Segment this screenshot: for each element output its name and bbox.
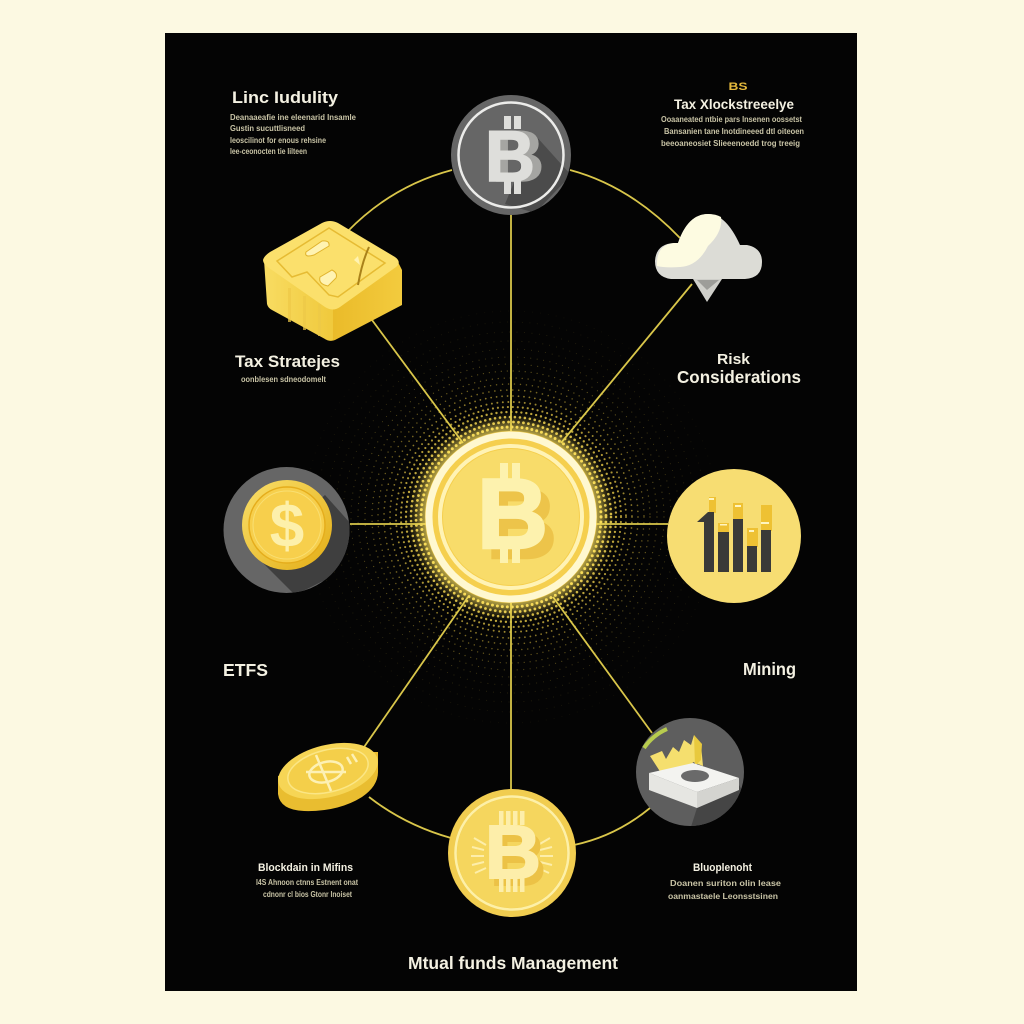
text block: tax top right: [661, 81, 804, 148]
bitcoin symbol shadow: B: [486, 468, 557, 579]
text block: tax top right: beeoaneosiet Slieeenoedd trog treeig: [661, 139, 800, 148]
bitcoin symbol: B: [477, 458, 548, 569]
text block: liquidity: Deanaaeafie ine eleenarid Insamle: [230, 113, 357, 122]
icon: dollar coin: $: [270, 492, 304, 561]
dark poster panel: [165, 33, 857, 991]
text block: risk considerations: Risk: [717, 351, 751, 368]
text block: risk considerations: [677, 351, 801, 387]
text block: liquidity: Iee-ceonocten tie Iilteen: [230, 147, 307, 156]
connector lines: [348, 170, 692, 845]
text block: tax strategies: [235, 352, 340, 384]
bitcoin symbol: B: [485, 810, 541, 894]
text block: liquidity: Ieoscilinot for enous rehsine: [230, 136, 326, 145]
bitcoin symbol shadow: B: [490, 817, 546, 901]
icon: mining block: [636, 718, 748, 830]
halftone dot halo: [305, 311, 717, 723]
icon: tilted gold coin: [272, 733, 384, 811]
icon: bar chart circle: [667, 469, 801, 603]
text block: tax top right: Tax Xlockstreeelye: [674, 96, 794, 112]
text block: blueprint: Bluoplenoht: [693, 862, 752, 874]
text block: tax top right: BS: [728, 81, 748, 93]
text block: blueprint: Doanen suriton olin Iease: [670, 879, 782, 888]
text block: liquidity: Linc Iudulity: [232, 88, 339, 107]
label: mutual funds management: Mtual funds Management: [408, 953, 618, 973]
text block: blueprint: [668, 862, 782, 901]
text block: risk considerations: Considerations: [677, 367, 801, 387]
text block: tax strategies: Tax Stratejes: [235, 352, 340, 371]
label: Mining: Mining: [743, 659, 796, 679]
icon: bottom bitcoin coin: [448, 789, 576, 917]
text block: tax top right: Bansanien tane Inotdineeed dtl oiteoen: [664, 127, 804, 136]
text block: tax top right: Ooaaneated ntbie pars Insenen oossetst: [661, 115, 802, 124]
icon: top silver bitcoin: B: [492, 117, 544, 197]
label: ETFS: ETFS: [223, 660, 268, 680]
icon: dollar coin: [224, 467, 351, 595]
text block: blockchain: I4S Ahnoon ctnns Estnent onat: [256, 878, 358, 887]
text block: blockchain: cdnonr cl bios Gtonr Inoiset: [263, 890, 352, 899]
icon: central bitcoin coin: [419, 425, 603, 609]
text block: tax strategies: oonblesen sdneodomelt: [241, 375, 326, 384]
text block: blueprint: oanmastaele Leonsstsinen: [668, 892, 778, 901]
icon: top silver bitcoin: B: [485, 117, 535, 197]
text block: blockchain: [256, 862, 358, 899]
text block: liquidity: Gustin sucuttlisneed: [230, 124, 305, 133]
icon: gold bar with document: [263, 221, 402, 341]
text block: liquidity: [230, 88, 357, 156]
text block: blockchain: Blockdain in Mifins: [258, 862, 353, 874]
icon: cloud with arrow: [655, 214, 762, 302]
icon: top silver bitcoin: [451, 95, 571, 215]
